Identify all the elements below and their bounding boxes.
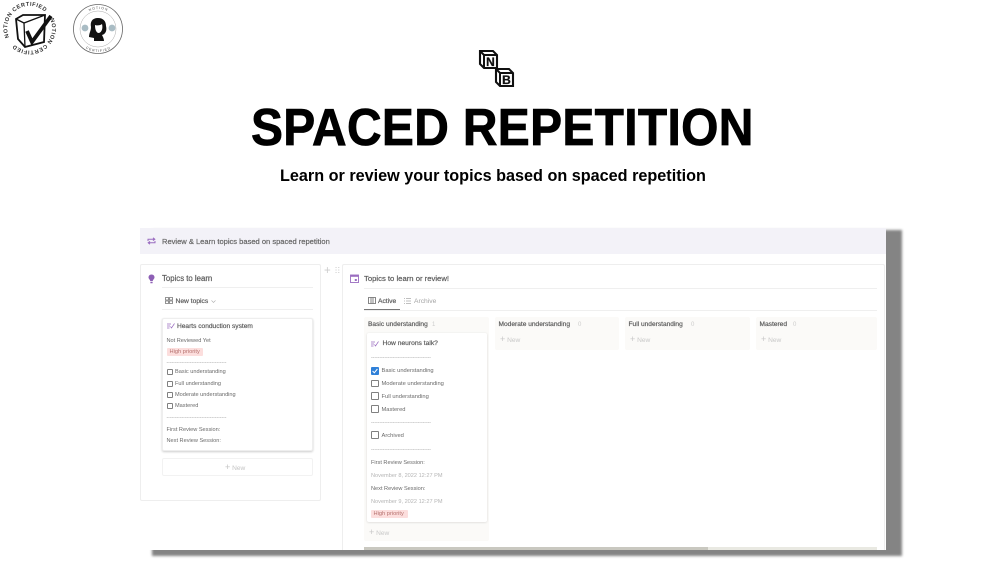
checkbox: full understanding: Full understanding: [382, 394, 429, 400]
column heading: Basic understanding: [368, 320, 428, 328]
card title: Hearts conduction system: [177, 322, 253, 330]
panel: topics to learn: [140, 264, 321, 501]
badge: Notion certified cube: NOTION CERTIFIED: [13, 18, 56, 54]
icon: board: [368, 297, 376, 304]
screenshot drop shadow: [152, 230, 902, 556]
tab label: New topics: [176, 298, 208, 304]
column count: 1: [432, 322, 435, 328]
column: moderate understanding: [495, 317, 619, 350]
panel: topics to learn or review: [342, 264, 885, 554]
checkbox: full understanding: [371, 392, 429, 400]
badge: Notion certified portrait: [73, 4, 123, 54]
column count: 0: [578, 322, 581, 328]
priority tag: [167, 348, 203, 356]
first review date: November 8, 2022 12:27 PM: [371, 472, 443, 478]
panel heading: Topics to learn or review!: [364, 274, 449, 282]
scrollbar thumb: [364, 547, 708, 551]
banner text: Review & Learn topics based on spaced repetition: [162, 236, 330, 246]
column count: 0: [793, 322, 796, 328]
icon: checklist: [371, 341, 379, 346]
column heading: Mastered: [760, 320, 787, 328]
column heading: Moderate understanding: [498, 320, 570, 328]
new card button: + New: [369, 526, 389, 536]
badge: Notion certified portrait: CERTIFIED: [86, 46, 110, 52]
checkbox: full understanding: Full understanding: [175, 380, 221, 386]
icon: light bulb: [148, 274, 154, 284]
separator: ------------------------------------: [371, 446, 431, 452]
panel heading: Topics to learn: [162, 274, 212, 282]
tab: archive: [404, 298, 436, 304]
separator: ------------------------------------: [371, 420, 431, 426]
priority tag: High priority: [374, 510, 404, 516]
checkbox: archived: Archived: [382, 432, 404, 438]
separator: ------------------------------------: [371, 355, 431, 361]
new card button: [162, 458, 313, 476]
checkbox: mastered: [167, 402, 198, 409]
icon: add and drag handles: +: [324, 265, 331, 277]
next review session: Next Review Session:: [166, 438, 221, 444]
checkbox: basic understanding checked: [371, 367, 434, 375]
tab label: Active: [378, 298, 396, 304]
next review label: Next Review Session:: [371, 486, 425, 492]
icon: checklist: [167, 323, 175, 328]
new card button: + New: [630, 334, 650, 344]
horizontal scrollbar: [364, 547, 877, 551]
checkbox: mastered: Mastered: [175, 402, 198, 408]
checkbox: mastered: Mastered: [382, 406, 405, 412]
icon: Notion N and B blocks: B: [502, 73, 511, 87]
screenshot: Notion page: [140, 228, 886, 550]
checkbox: moderate understanding: Moderate understanding: [382, 381, 444, 387]
separator: ------------------------------------: [166, 415, 226, 421]
icon: calendar: [350, 274, 359, 283]
card: how neurons talk: [367, 333, 487, 522]
title: SPACED REPETITION: [251, 99, 754, 157]
tab label: Archive: [414, 298, 436, 304]
next review date: November 9, 2022 12:27 PM: [371, 498, 443, 504]
icon: Notion N and B blocks: [478, 50, 514, 87]
column: full understanding: [625, 317, 750, 350]
column: mastered: [756, 317, 877, 350]
new card button: + New: [761, 334, 781, 344]
first review session: First Review Session:: [166, 426, 220, 432]
checkbox: basic understanding: Basic understanding: [175, 369, 226, 375]
view tab: new topics: [165, 297, 216, 305]
icon: chevron: [211, 300, 216, 303]
card: hearts conduction system: [162, 318, 313, 451]
banner: [140, 228, 886, 254]
checkbox: archived: [371, 431, 404, 439]
tab: active: [364, 296, 400, 310]
priority tag: High priority: [170, 348, 200, 354]
column heading: Full understanding: [628, 320, 683, 328]
icon: add and drag handles: [324, 265, 340, 277]
priority tag: [371, 510, 408, 518]
subtitle: Learn or review your topics based on spaced repetition: [280, 167, 706, 185]
icon: gallery grid: [165, 297, 173, 304]
column count: 0: [691, 322, 694, 328]
checkbox: mastered: [371, 405, 406, 413]
checkbox: basic understanding checked: Basic understanding: [382, 368, 434, 374]
badge: Notion certified portrait: NOTION: [88, 6, 108, 12]
badge: Notion certified cube: [3, 2, 56, 54]
new card button: + New: [500, 334, 520, 344]
card title: How neurons talk?: [382, 340, 438, 346]
first review label: First Review Session:: [371, 460, 425, 466]
button label: + New: [225, 462, 245, 472]
column: basic understanding: [364, 317, 489, 541]
review status: Not Reviewed Yet: [166, 338, 211, 344]
checkbox: moderate understanding: Moderate understanding: [175, 392, 236, 398]
icon: repeat arrows: [148, 237, 156, 245]
icon: Notion N and B blocks: N: [486, 55, 495, 69]
separator: ------------------------------------: [166, 360, 226, 366]
badge: Notion certified cube: NOTION CERTIFIED: [3, 2, 46, 38]
icon: list: [404, 298, 411, 304]
